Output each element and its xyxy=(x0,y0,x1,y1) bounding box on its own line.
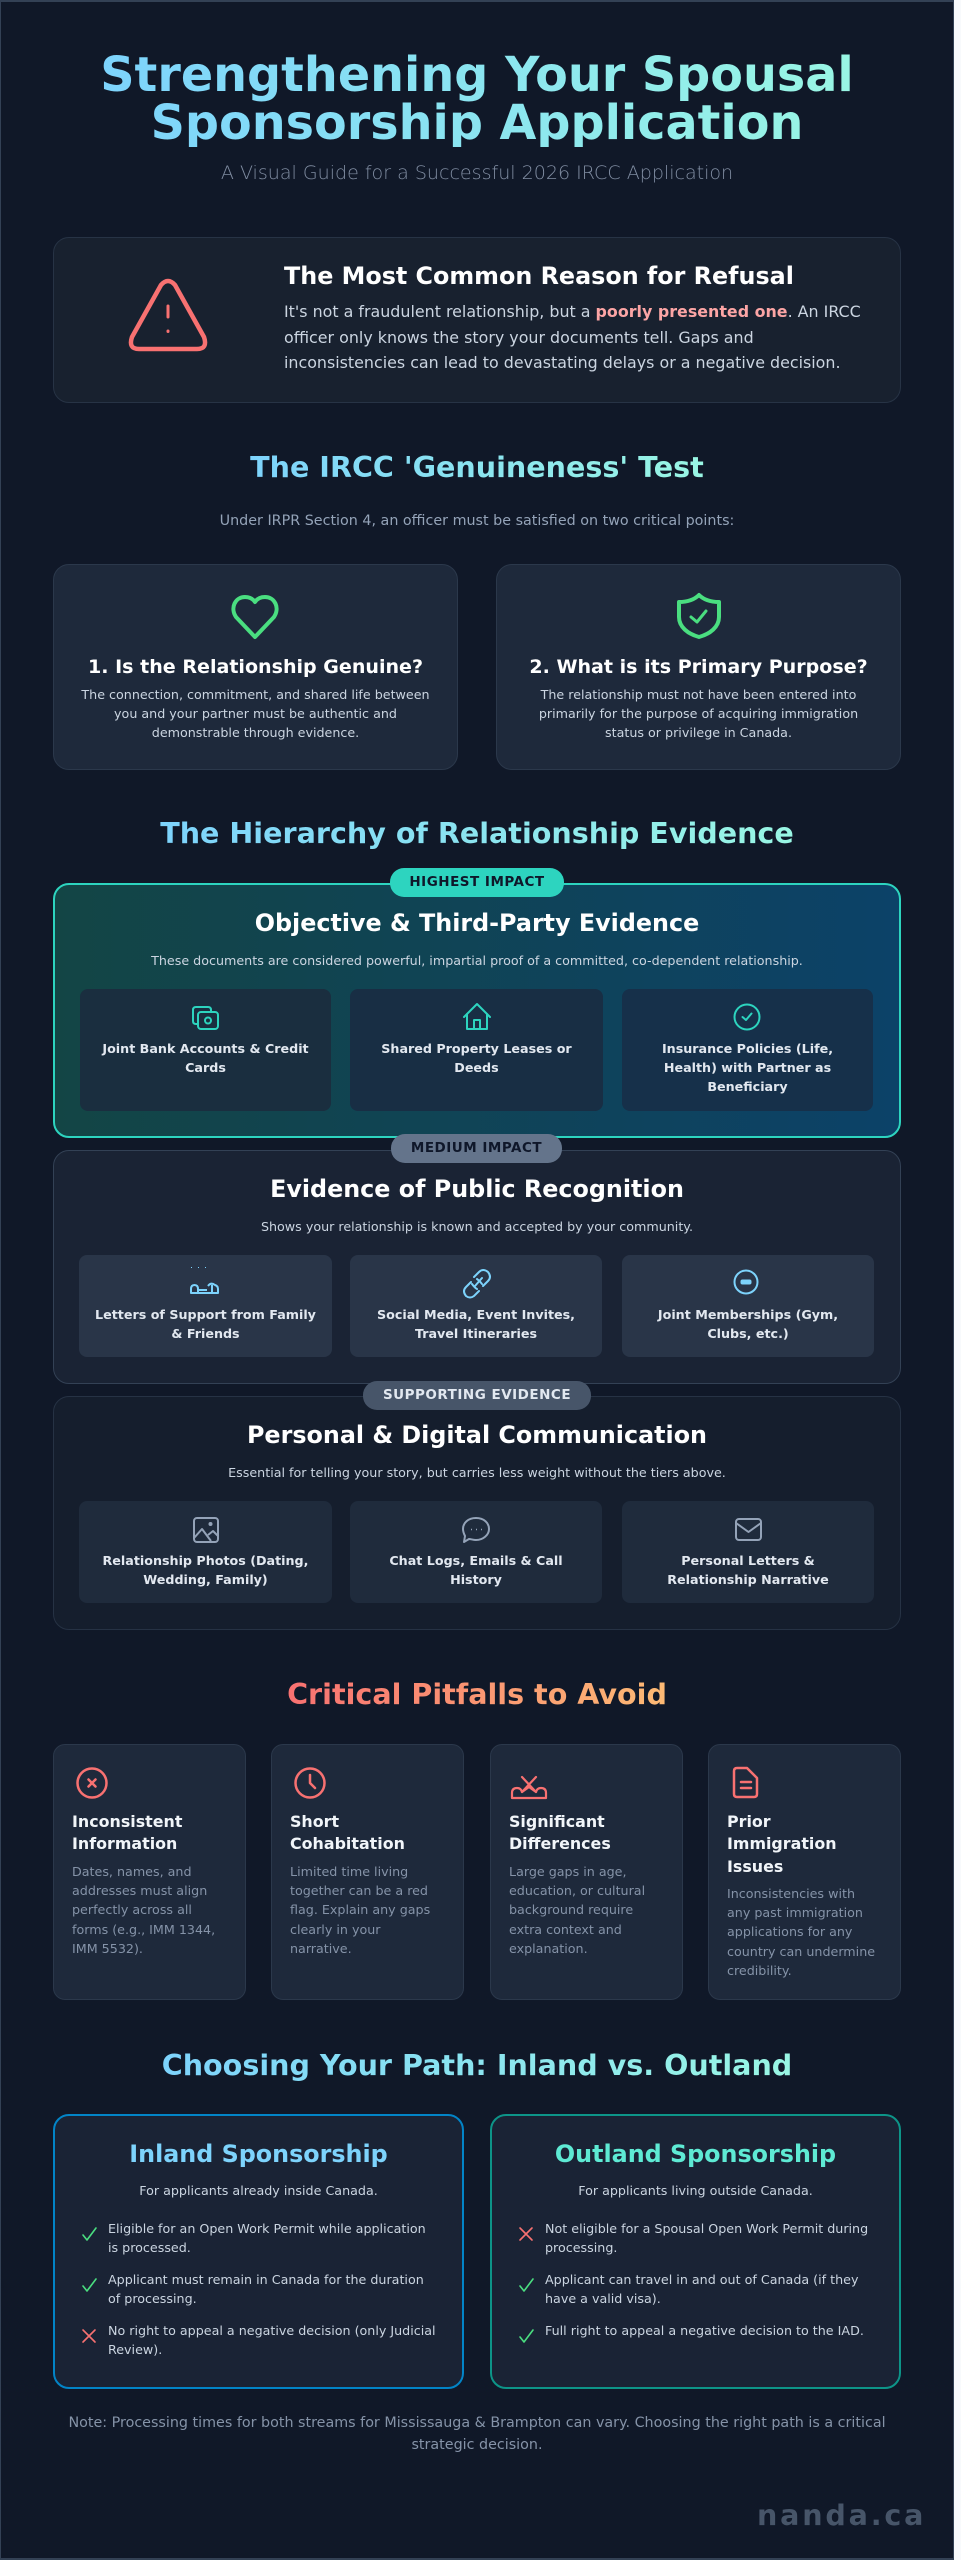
item label: History xyxy=(450,1572,502,1587)
evidence item: insurance xyxy=(622,989,873,1111)
criterion text: processing. xyxy=(545,2240,617,2255)
item label xyxy=(102,1041,309,1075)
tier description: Shows your relationship is known and accepted by your community. xyxy=(261,1219,693,1234)
panel: primary purpose xyxy=(496,564,901,770)
card title: 1. Is the Relationship Genuine? xyxy=(88,656,423,678)
criterion text: Review). xyxy=(108,2342,162,2357)
item label: & Friends xyxy=(171,1326,240,1341)
item label: Chat Logs, Emails & Call xyxy=(389,1553,563,1568)
item label: Relationship Narrative xyxy=(667,1572,829,1587)
item label: Relationship Photos (Dating, xyxy=(103,1553,308,1568)
pitfall text: explanation. xyxy=(509,1941,588,1956)
pitfall text xyxy=(509,1864,645,1956)
tier title: Personal & Digital Communication xyxy=(247,1421,707,1449)
note: Note: Processing times for both streams for Mississauga & Brampton can vary. Choosing the right path is a critical xyxy=(68,2415,886,2431)
pitfall text: any past immigration xyxy=(727,1905,863,1920)
criterion text xyxy=(545,2270,858,2308)
pitfall text: clearly in your xyxy=(290,1922,380,1937)
pitfall text: addresses must align xyxy=(72,1883,207,1898)
pitfall title: Cohabitation xyxy=(290,1834,405,1853)
criterion text xyxy=(108,2321,436,2359)
card title: 2. What is its Primary Purpose? xyxy=(529,656,868,678)
panel: short cohabitation xyxy=(271,1744,464,2000)
panel: supporting evidence tier xyxy=(53,1396,901,1630)
pitfall text: country can undermine xyxy=(727,1944,875,1959)
pitfall title xyxy=(509,1812,611,1853)
badge: supporting evidence: SUPPORTING EVIDENCE xyxy=(383,1387,571,1403)
item label: Joint Bank Accounts & Credit xyxy=(102,1041,309,1056)
pitfall text: background require xyxy=(509,1902,633,1917)
pitfall title: Immigration xyxy=(727,1834,837,1853)
pitfall text: flag. Explain any gaps xyxy=(290,1902,430,1917)
path description: For applicants living outside Canada. xyxy=(578,2183,813,2198)
note: strategic decision. xyxy=(411,2437,543,2453)
mark: cross xyxy=(519,2227,533,2241)
panel: is the relationship genuine xyxy=(53,564,458,770)
path title: Outland Sponsorship xyxy=(555,2140,836,2168)
pitfall text: forms (e.g., IMM 1344, xyxy=(72,1922,215,1937)
item label: Personal Letters & xyxy=(681,1553,815,1568)
item label: Clubs, etc.) xyxy=(707,1326,789,1341)
panel: outland sponsorship xyxy=(490,2114,901,2389)
icon: envelope xyxy=(735,1518,762,1541)
mark: check xyxy=(82,2227,97,2241)
pitfall text: together can be a red xyxy=(290,1883,428,1898)
panel: highest impact tier xyxy=(53,883,901,1138)
card text: status or privilege in Canada. xyxy=(605,725,792,740)
badge: medium impact xyxy=(391,1134,562,1163)
note xyxy=(1,2412,953,2456)
panel: inland sponsorship xyxy=(53,2114,464,2389)
refusal body text xyxy=(284,302,861,372)
path title: Inland Sponsorship xyxy=(129,2140,388,2168)
criterion text: No right to appeal a negative decision (only Judicial xyxy=(108,2323,436,2338)
title: Sponsorship Application xyxy=(151,96,803,150)
icon: x circle xyxy=(76,1767,108,1799)
criterion text: have a valid visa). xyxy=(545,2291,661,2306)
icon: cash xyxy=(192,1006,219,1030)
criterion list xyxy=(492,2116,899,2387)
genuineness intro: Under IRPR Section 4, an officer must be satisfied on two critical points: xyxy=(220,513,734,529)
panel: most common reason for refusal xyxy=(53,237,901,403)
item label: Cards xyxy=(185,1060,226,1075)
heading: choosing your path: Choosing Your Path: Inland vs. Outland xyxy=(162,2048,792,2082)
pitfall title: Differences xyxy=(509,1834,611,1853)
item label: Travel Itineraries xyxy=(415,1326,537,1341)
pitfall text: education, or cultural xyxy=(509,1883,645,1898)
evidence item: bank accounts xyxy=(80,989,331,1111)
pitfall title: Short xyxy=(290,1812,339,1831)
item label xyxy=(667,1553,829,1587)
tier description: Essential for telling your story, but carries less weight without the tiers above. xyxy=(228,1465,726,1480)
refusal heading: The Most Common Reason for Refusal xyxy=(284,262,794,290)
refusal body text: officer only knows the story your documents tell. Gaps and xyxy=(284,328,754,347)
panel: medium impact tier xyxy=(53,1150,901,1384)
item label xyxy=(657,1307,838,1341)
pitfall text: narrative. xyxy=(290,1941,352,1956)
item label xyxy=(389,1553,563,1587)
card text xyxy=(81,686,430,740)
pitfall title xyxy=(72,1812,182,1853)
pitfall text: applications for any xyxy=(727,1924,852,1939)
card text: The relationship must not have been entered into xyxy=(541,686,856,702)
item label: Joint Memberships (Gym, xyxy=(658,1307,838,1322)
item label xyxy=(95,1307,316,1341)
evidence item: property xyxy=(350,989,603,1111)
criterion text: Not eligible for a Spousal Open Work Permit during xyxy=(545,2221,868,2236)
pitfall text xyxy=(727,1886,875,1978)
pitfall text: Dates, names, and xyxy=(72,1864,192,1879)
criterion text: of processing. xyxy=(108,2291,197,2306)
heading: critical pitfalls: Critical Pitfalls to Avoid xyxy=(287,1677,667,1711)
criterion text xyxy=(108,2219,426,2257)
pitfall text: perfectly across all xyxy=(72,1902,192,1917)
criterion text: Eligible for an Open Work Permit while application xyxy=(108,2221,426,2236)
criterion text xyxy=(545,2219,868,2257)
card text: primarily for the purpose of acquiring immigration xyxy=(539,706,858,721)
panel: prior immigration issues xyxy=(708,1744,901,2000)
card text xyxy=(539,686,858,740)
title xyxy=(100,48,854,150)
card text: The connection, commitment, and shared life between xyxy=(81,686,430,702)
evidence item: chat logs xyxy=(350,1501,602,1603)
brand watermark: nanda.ca xyxy=(757,2498,926,2532)
criterion text: Full right to appeal a negative decision to the IAD. xyxy=(545,2323,864,2338)
pitfall text: Limited time living xyxy=(290,1864,408,1879)
icon: photo xyxy=(193,1517,219,1543)
heading: hierarchy of evidence: The Hierarchy of Relationship Evidence xyxy=(160,816,794,850)
subtitle: A Visual Guide for a Successful 2026 IRCC Application xyxy=(221,162,733,184)
icon: clock xyxy=(294,1767,326,1799)
icon: minus circle xyxy=(734,1270,758,1294)
pitfall title: Significant xyxy=(509,1812,605,1831)
tier title: Evidence of Public Recognition xyxy=(270,1175,684,1203)
icon: letters of support glyph xyxy=(190,1267,219,1294)
badge: highest impact xyxy=(390,868,564,897)
path description: For applicants already inside Canada. xyxy=(139,2183,378,2198)
icon: heart xyxy=(231,595,279,640)
icon: warning triangle xyxy=(128,278,208,352)
item label xyxy=(662,1041,833,1094)
item label xyxy=(377,1307,575,1341)
icon: document xyxy=(732,1766,758,1798)
icon: link xyxy=(462,1269,491,1298)
pitfall text: Large gaps in age, xyxy=(509,1864,627,1879)
card text: demonstrable through evidence. xyxy=(152,725,359,740)
item label xyxy=(103,1553,308,1587)
badge: highest impact: HIGHEST IMPACT xyxy=(409,874,545,890)
pitfall title: Information xyxy=(72,1834,177,1853)
pitfall title: Inconsistent xyxy=(72,1812,182,1831)
tier description: These documents are considered powerful, impartial proof of a committed, co-dependent relationship. xyxy=(151,953,803,968)
pitfall title: Issues xyxy=(727,1857,783,1876)
pitfall text: IMM 5532). xyxy=(72,1941,143,1956)
evidence item: photos xyxy=(79,1501,332,1603)
title: Strengthening Your Spousal xyxy=(100,48,854,103)
icon: chat bubble xyxy=(462,1517,490,1543)
mark: check xyxy=(519,2278,534,2292)
pitfall text xyxy=(290,1864,430,1956)
item label xyxy=(381,1041,572,1075)
evidence item: memberships xyxy=(622,1255,874,1357)
criterion text xyxy=(108,2270,424,2308)
pitfall text: credibility. xyxy=(727,1963,792,1978)
mark: check xyxy=(519,2329,534,2343)
item label: Insurance Policies (Life, xyxy=(662,1041,833,1056)
item label: Deeds xyxy=(454,1060,499,1075)
icon: check circle xyxy=(734,1004,760,1030)
evidence item: personal letters xyxy=(622,1501,874,1603)
criterion list xyxy=(55,2116,462,2387)
icon: house xyxy=(463,1003,491,1030)
badge: supporting evidence xyxy=(363,1381,591,1410)
criterion text: is processed. xyxy=(108,2240,191,2255)
criterion text: Applicant must remain in Canada for the duration xyxy=(108,2272,424,2287)
pitfall title: Prior xyxy=(727,1812,771,1831)
card text: you and your partner must be authentic and xyxy=(114,706,397,721)
criterion text: Applicant can travel in and out of Canada (if they xyxy=(545,2272,858,2287)
panel: significant differences xyxy=(490,1744,683,2000)
mark: check xyxy=(82,2278,97,2292)
tier title: Objective & Third-Party Evidence xyxy=(255,909,699,937)
pitfall title xyxy=(290,1812,405,1853)
item label: Shared Property Leases or xyxy=(381,1041,572,1056)
icon: differences glyph xyxy=(510,1776,548,1800)
mark: cross xyxy=(82,2329,96,2343)
pitfall text xyxy=(72,1864,215,1956)
heading: genuineness test: The IRCC 'Genuineness' Test xyxy=(250,450,704,484)
item label: Letters of Support from Family xyxy=(95,1307,316,1322)
panel: inconsistent information xyxy=(53,1744,246,2000)
item label: Social Media, Event Invites, xyxy=(377,1307,575,1322)
refusal body text: It's not a fraudulent relationship, but a poorly presented one. An IRCC xyxy=(284,302,861,321)
evidence item: letters of support xyxy=(79,1255,332,1357)
item label: Beneficiary xyxy=(707,1079,788,1094)
pitfall text: extra context and xyxy=(509,1922,622,1937)
refusal body text: inconsistencies can lead to devastating delays or a negative decision. xyxy=(284,353,841,372)
item label: Wedding, Family) xyxy=(143,1572,268,1587)
evidence item: social media xyxy=(350,1255,602,1357)
badge: medium impact: MEDIUM IMPACT xyxy=(411,1140,542,1156)
item label: Health) with Partner as xyxy=(664,1060,831,1075)
icon: shield check xyxy=(677,592,721,639)
pitfall title xyxy=(727,1812,837,1876)
pitfall text: Inconsistencies with xyxy=(727,1886,855,1901)
